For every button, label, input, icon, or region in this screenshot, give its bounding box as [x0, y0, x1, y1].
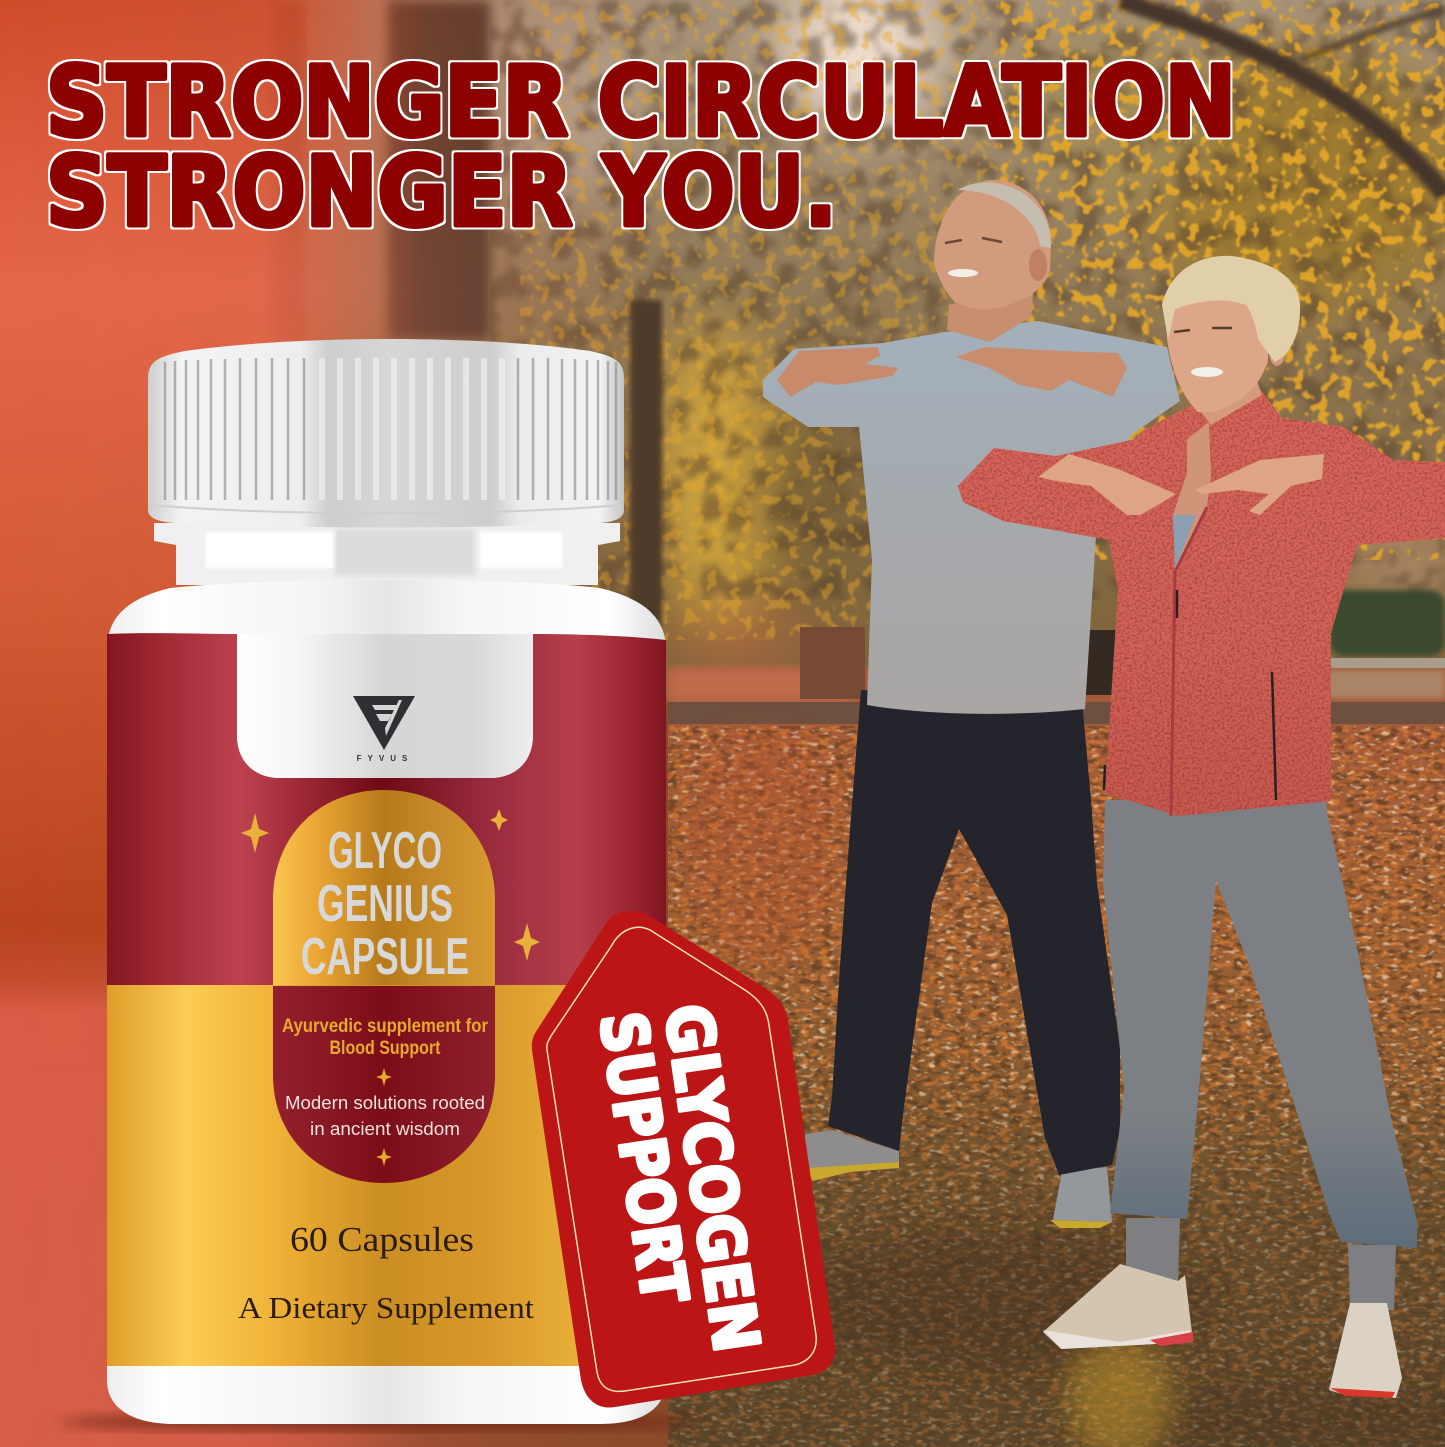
woman: left hand — [1038, 454, 1176, 515]
man: left forearm — [777, 347, 898, 397]
bottle: body — [107, 580, 666, 1424]
woman: zipper — [1171, 507, 1207, 816]
label capsule: gold top: GENIUS — [317, 875, 453, 933]
man: neck — [947, 285, 1034, 342]
woman: neck — [1192, 375, 1262, 425]
woman: trousers — [1103, 800, 1417, 1248]
label capsule: red bottom: Modern solutions rooted — [285, 1093, 485, 1113]
woman exercising — [958, 256, 1445, 1398]
woman: jacket — [958, 389, 1445, 816]
man exercising — [763, 180, 1180, 1228]
man: right forearm — [956, 347, 1127, 397]
bottle: neck — [154, 523, 620, 585]
label capsule: red bottom: Ayurvedic supplement for — [282, 1016, 489, 1037]
park bin — [800, 627, 865, 699]
headline — [46, 46, 1236, 248]
supplement bottle — [60, 339, 700, 1432]
left red gradient overlay — [0, 0, 578, 1447]
woman: right hand — [1195, 454, 1324, 515]
label capsule: red bottom: in ancient wisdom — [310, 1119, 460, 1139]
icon: sparkles — [241, 809, 540, 961]
man: sweater — [763, 321, 1180, 714]
label capsule: red bottom: Blood Support — [330, 1038, 441, 1059]
tag: glycogen support: GLYCOGEN — [650, 1000, 773, 1356]
bottle label: gold band — [107, 985, 666, 1366]
woman: socks — [1126, 1218, 1396, 1310]
brand logo: FYVUS — [357, 754, 413, 763]
bottle: cap — [148, 339, 624, 528]
dietary supplement text: A Dietary Supplement — [238, 1290, 534, 1325]
woman: shoes — [1043, 1264, 1402, 1398]
bottle label: white notch — [237, 634, 533, 778]
man: shoes — [805, 1130, 1112, 1228]
label capsule: gold top: CAPSULE — [301, 928, 469, 986]
brand logo — [353, 696, 415, 763]
headline: STRONGER YOU. — [46, 136, 837, 248]
headline: STRONGER CIRCULATION — [46, 46, 1236, 158]
man: head — [934, 180, 1051, 309]
capsule count: 60 Capsules — [290, 1220, 474, 1259]
woman: inner top — [1173, 515, 1196, 570]
park bench — [1085, 630, 1120, 695]
label capsule: red bottom — [273, 986, 495, 1183]
woman: head — [1167, 284, 1268, 412]
man: trousers — [828, 690, 1120, 1175]
tag: glycogen support: SUPPORT — [585, 1007, 701, 1308]
tag: glycogen support — [532, 911, 835, 1408]
label capsule: gold top — [273, 790, 495, 986]
label capsule: gold top: GLYCO — [328, 822, 442, 880]
woman: chest — [1173, 422, 1211, 570]
bottle label: red band — [107, 633, 666, 985]
